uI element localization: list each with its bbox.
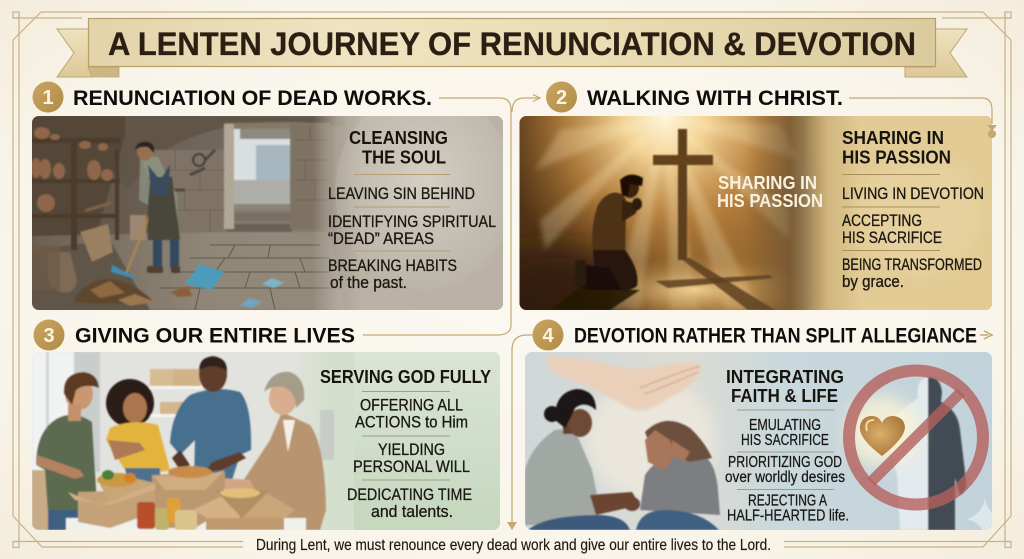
panel 1 text xyxy=(328,127,496,292)
floor stones xyxy=(160,245,340,310)
fade to text area xyxy=(751,116,818,310)
connector 2 to 3 xyxy=(849,98,992,124)
step 2 heading xyxy=(546,82,843,112)
wall stones xyxy=(150,124,330,232)
sparkle xyxy=(966,498,992,530)
window xyxy=(74,352,100,472)
heading text 2: WALKING WITH CHRIST. xyxy=(587,87,843,110)
fade to text area xyxy=(308,352,354,530)
panel 3 text: OFFERING ALL xyxy=(360,397,463,415)
panel 1 text: of the past. xyxy=(330,274,407,292)
panel 4: integrating faith and life xyxy=(525,352,1003,538)
light rays xyxy=(535,118,800,310)
arrow after heading 4 xyxy=(980,331,992,339)
panel 4 text: PRIORITIZING GOD xyxy=(728,454,842,471)
footer message: During Lent, we must renounce every dead work and give our entire lives to the Lord. xyxy=(256,537,771,554)
caption over the image: SHARING IN xyxy=(718,172,817,193)
woman right xyxy=(640,452,720,515)
panel 1 text: IDENTIFYING SPIRITUAL xyxy=(328,213,496,231)
hanging clothes xyxy=(320,410,334,460)
panel 2 text: HIS SACRIFICE xyxy=(842,229,942,247)
floor light xyxy=(612,262,780,310)
cross shadow xyxy=(680,258,775,310)
fade to text area xyxy=(312,116,362,310)
panel 1 text: “DEAD” AREAS xyxy=(328,230,434,248)
woman sweeping xyxy=(111,142,180,279)
panel 1 text: LEAVING SIN BEHIND xyxy=(328,185,475,203)
table xyxy=(66,518,306,532)
panel 2 text xyxy=(842,127,984,291)
arrow head and dot on connector xyxy=(987,125,997,138)
panel 2 text: ACCEPTING xyxy=(842,212,922,230)
panel 3 text: DEDICATING TIME xyxy=(347,486,472,504)
panel 1 text: BREAKING HABITS xyxy=(328,257,457,275)
heading text 1: RENUNCIATION OF DEAD WORKS. xyxy=(73,87,432,110)
panel 1 text: THE SOUL xyxy=(362,146,446,168)
kneeling man xyxy=(550,288,640,310)
connector into step 4 xyxy=(512,335,533,522)
illustration: two women, hand from above, no-split sign xyxy=(525,352,1003,538)
step 1 heading xyxy=(32,82,432,112)
person 3 xyxy=(170,389,251,480)
panel 4 text: FAITH & LIFE xyxy=(731,385,838,406)
step 4 heading: 4 xyxy=(542,325,554,347)
back shelves and boxes xyxy=(150,369,173,386)
debris and dustpan xyxy=(75,264,284,308)
shelves and pots xyxy=(31,127,146,292)
step 3 heading xyxy=(34,320,355,350)
woman left xyxy=(525,428,600,525)
panel 3 text: SERVING GOD FULLY xyxy=(320,366,492,387)
banner body xyxy=(88,18,936,66)
panel 4 text: EMULATING xyxy=(749,417,821,434)
no sign: split figure xyxy=(894,376,967,530)
left ribbon fold xyxy=(88,67,119,77)
left ribbon tail xyxy=(57,29,92,77)
number badge 3 xyxy=(34,320,64,350)
illustration: family packing food boxes xyxy=(32,352,500,532)
panel 2 text: BEING TRANSFORMED xyxy=(842,256,982,274)
panel 3 text: YIELDING xyxy=(378,441,445,459)
panel 2 text: LIVING IN DEVOTION xyxy=(842,185,984,203)
step 2 heading: 2 xyxy=(556,87,567,109)
connector arrows xyxy=(363,94,997,530)
panel 1: cleansing the soul xyxy=(32,116,503,310)
person 1 xyxy=(36,415,97,514)
step 1 heading: 1 xyxy=(42,87,54,109)
panel 4 text: INTEGRATING xyxy=(726,366,844,387)
panel 4 text: HALF-HEARTED life. xyxy=(727,508,849,525)
panel 3 text: ACTIONS to Him xyxy=(355,414,468,432)
panel 1 text: CLEANSING xyxy=(349,127,448,148)
illustration: man kneeling before a cross xyxy=(520,116,992,310)
heart glow xyxy=(846,397,918,465)
panel 3 text: and talents. xyxy=(371,503,453,521)
step 3 heading: 3 xyxy=(43,325,55,347)
right ribbon tail xyxy=(905,29,967,77)
panel 3: serving god fully xyxy=(32,352,500,532)
title banner xyxy=(57,18,967,77)
food boxes xyxy=(152,472,225,528)
panel 2 text: SHARING IN xyxy=(842,127,944,148)
jars xyxy=(137,502,155,529)
arrow down to footer xyxy=(507,522,517,530)
illustration: woman sweeping a stone cellar xyxy=(32,116,503,310)
connector 1 to 2 xyxy=(363,98,511,335)
prohibition ring xyxy=(849,370,983,504)
panel 3 text xyxy=(320,366,492,521)
panel 4 text: HIS SACRIFICE xyxy=(741,432,829,449)
heart xyxy=(860,416,905,456)
open hand xyxy=(545,356,702,410)
heading text 3: GIVING OUR ENTIRE LIVES xyxy=(75,325,355,348)
person 2 xyxy=(106,379,154,427)
number badge 1 xyxy=(32,82,64,112)
cross xyxy=(678,129,687,260)
panel 2: sharing in his passion xyxy=(520,116,992,310)
panel 4 text: REJECTING A xyxy=(748,493,828,510)
number badge 4 xyxy=(532,320,564,350)
panel 4 text xyxy=(725,366,849,525)
caption over the image xyxy=(717,172,823,211)
caption over the image: HIS PASSION xyxy=(717,190,823,211)
number badge 2 xyxy=(546,82,577,112)
panel 3 text: PERSONAL WILL xyxy=(353,458,470,476)
bottom-left darkening xyxy=(520,224,648,310)
arrow into step 2 xyxy=(512,94,540,112)
title: A LENTEN JOURNEY OF RENUNCIATION & DEVOTION xyxy=(108,26,916,62)
panel 4 text: over worldly desires xyxy=(725,469,845,486)
person 4 xyxy=(244,414,327,530)
panel 2 text: by grace. xyxy=(842,273,904,291)
panel 2 text: HIS PASSION xyxy=(842,146,951,168)
step 4 heading xyxy=(532,320,977,350)
